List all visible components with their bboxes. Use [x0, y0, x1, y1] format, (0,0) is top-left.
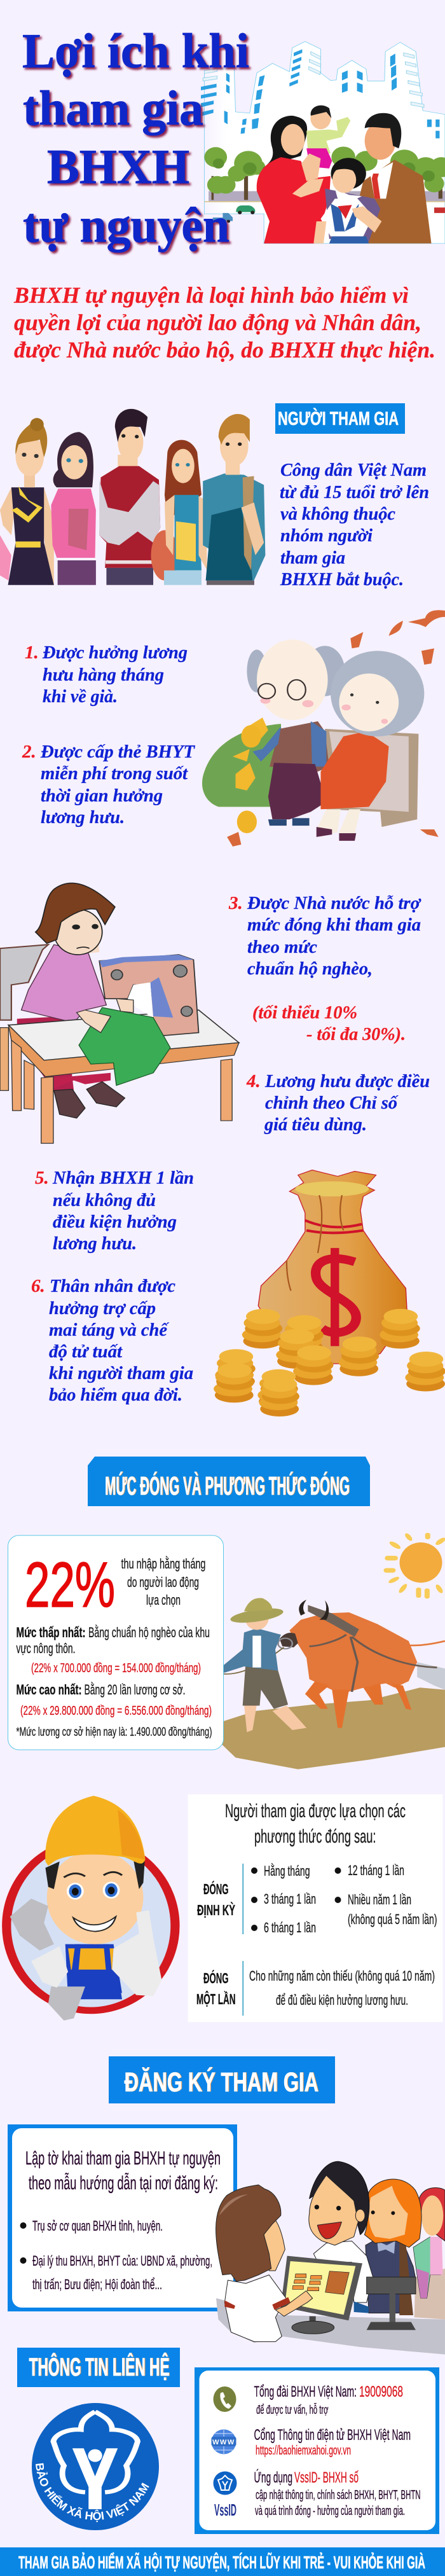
benefit 5: điều kiện hưởng [53, 1212, 177, 1232]
benefit 5: nếu không đủ [53, 1190, 156, 1210]
text: eligible participants [280, 460, 429, 590]
contact: app: VssID- BHXH số [294, 2469, 359, 2486]
section: periodic payment [197, 1862, 437, 1935]
text: minimum rate [17, 1624, 210, 1675]
contact: hotline [254, 2383, 403, 2417]
intro text: quyền lợi của người lao động và Nhân dân, [14, 310, 421, 335]
benefit 1: khi về già. [43, 686, 118, 707]
benefit 4 [246, 1071, 430, 1135]
benefit 2: lương hưu. [41, 807, 125, 828]
benefit 3: mức đóng khi tham gia [247, 915, 421, 935]
benefit 4: 4. [246, 1071, 261, 1091]
label: thông tin liên hệ: THÔNG TIN LIÊN HỆ [29, 2352, 169, 2381]
text: maximum rate: Bằng 20 lần lương cơ sở. [84, 1682, 186, 1698]
benefit 2: 2. [22, 742, 36, 762]
illustration: money bag and coins [214, 1170, 445, 1416]
banner: mức đóng và phương thức đóng [88, 1457, 370, 1506]
list: registration places: Trụ sở cơ quan BHXH tỉnh, huyện. [32, 2218, 163, 2234]
illustration: family in front of city [201, 41, 445, 244]
text: rate description: lựa chọn [146, 1592, 181, 1608]
benefit 6: Thân nhân được [50, 1276, 175, 1296]
icon: sun [384, 1532, 445, 1598]
text: base salary note: *Mức lương cơ sở hiện nay là: 1.490.000 đồng/tháng) [17, 1726, 212, 1739]
title: tham gia [23, 81, 203, 135]
intro text: BHXH tự nguyện là loại hình bảo hiểm vì [13, 282, 409, 308]
benefit 6: hưởng trợ cấp [49, 1298, 156, 1319]
benefit 3: chuẩn hộ nghèo, [247, 959, 373, 979]
intro text: được Nhà nước bảo hộ, do BHXH thực hiện. [14, 337, 435, 363]
text: maximum rate: (22% x 29.800.000 đồng = 6.556.000 đồng/tháng) [20, 1704, 212, 1718]
label: người tham gia [275, 403, 405, 434]
text: rate description [121, 1556, 206, 1608]
section: lump-sum payment: MỘT LẦN [196, 1990, 235, 2007]
icon: phone [214, 2386, 236, 2412]
benefit 1 [25, 642, 188, 707]
heading: payment methods [225, 1801, 406, 1847]
illustration: woman at sewing machine [0, 883, 239, 1144]
contact: hotline: Tổng đài BHXH Việt Nam: [254, 2383, 357, 2400]
stat: 22%: 22% [25, 1549, 115, 1621]
benefit 1: hưu hàng tháng [43, 665, 164, 685]
footer banner [0, 2547, 445, 2576]
section: periodic payment: 6 tháng 1 lần [264, 1920, 316, 1935]
list: registration places: thị trấn; Bưu điện; Hội đoàn thể... [32, 2276, 162, 2292]
text: eligible participants: BHXH bắt buộc. [280, 569, 404, 590]
benefit 3: - tối đa 30%). [306, 1024, 406, 1044]
text: eligible participants: nhóm người [280, 525, 373, 546]
benefit 6: mai táng và chế [49, 1320, 169, 1340]
list: registration places [20, 2218, 212, 2292]
benefit 5: 5. [35, 1168, 49, 1188]
title [22, 24, 249, 253]
benefit 6: khi người tham gia [49, 1363, 193, 1383]
benefit 2: thời gian hưởng [41, 786, 163, 806]
benefit 3 [228, 893, 421, 1044]
logo: Bảo hiểm xã hội Việt Nam [32, 2403, 159, 2530]
illustration: group of young people [0, 409, 265, 585]
text: eligible participants: từ đủ 15 tuổi trở lên [280, 482, 429, 502]
benefit 5 [35, 1168, 194, 1254]
benefit 6: 6. [31, 1276, 45, 1296]
benefit 4: giá tiêu dùng. [264, 1114, 367, 1135]
section: periodic payment: ĐỊNH KỲ [197, 1901, 235, 1918]
text: maximum rate: Mức cao nhất: [17, 1682, 81, 1698]
benefit 6: độ tử tuất [49, 1341, 123, 1362]
text: eligible participants: tham gia [280, 548, 345, 568]
benefit 4: Lương hưu được điều [264, 1071, 430, 1091]
text: eligible participants: và không thuộc [280, 504, 395, 524]
section: periodic payment: 3 tháng 1 lần [264, 1891, 316, 1907]
section: periodic payment: 12 tháng 1 lần [348, 1862, 404, 1878]
text: maximum rate [17, 1682, 212, 1718]
banner: đăng ký tham gia [109, 2056, 335, 2103]
panel: contribution rate [8, 1535, 224, 1750]
heading: registration form: Lập tờ khai tham gia BHXH tự nguyện [25, 2148, 221, 2169]
list: registration places: Đại lý thu BHXH, BHYT của: UBND xã, phường, [32, 2253, 212, 2269]
heading: registration form: theo mẫu hướng dẫn tại nơi đăng ký: [29, 2173, 218, 2194]
illustration: elderly couple on bench [202, 610, 445, 847]
section: lump-sum payment [196, 1961, 435, 2016]
text: minimum rate: Mức thấp nhất: [17, 1624, 85, 1640]
icon: www globe: WWW [212, 2439, 235, 2446]
illustration: people registering at a computer [216, 2161, 445, 2355]
text: minimum rate: Bằng chuẩn hộ nghèo của khu [88, 1624, 210, 1640]
benefit 1: 1. [25, 642, 39, 663]
benefit 3: Được Nhà nước hỗ trợ [247, 893, 421, 913]
logo: Bảo hiểm xã hội Việt Nam: BẢO HIỂM XÃ HỘI VIỆT NAM [36, 2463, 149, 2523]
benefit 1: Được hưởng lương [42, 642, 188, 663]
illustration: worker with wrench [6, 1796, 175, 2021]
contact: website: https://baohiemxahoi.gov.vn [256, 2444, 351, 2458]
benefit 2 [22, 742, 195, 828]
title: tự nguyện [23, 198, 229, 253]
section: periodic payment: Hằng tháng [264, 1863, 310, 1879]
contact: hotline: 19009068 [359, 2383, 403, 2400]
icon: VssID app [214, 2472, 236, 2519]
benefit 2: Được cấp thẻ BHYT [40, 742, 195, 762]
panel: registration [8, 2124, 237, 2311]
title: BHXH [47, 139, 189, 194]
benefit 4: chỉnh theo Chỉ số [265, 1093, 399, 1113]
benefit 3: 3. [228, 893, 243, 913]
text: eligible participants: Công dân Việt Nam [280, 460, 427, 480]
benefit 6: bảo hiểm qua đời. [49, 1385, 182, 1405]
title: Lợi ích khi [22, 24, 249, 78]
benefit 3: (tối thiểu 10% [252, 1002, 357, 1023]
contact: app: Ứng dụng [254, 2469, 292, 2486]
icon: www globe [211, 2430, 236, 2454]
text: minimum rate: vực nông thôn. [17, 1640, 75, 1656]
benefit 5: lương hưu. [53, 1233, 137, 1254]
banner: đăng ký tham gia: ĐĂNG KÝ THAM GIA [125, 2067, 318, 2098]
contact: app [254, 2469, 421, 2518]
section: lump-sum payment: ĐÓNG [203, 1969, 229, 1986]
panel: contact information: VssID [214, 2500, 236, 2519]
benefit 3: theo mức [247, 937, 317, 957]
section: periodic payment: ĐÓNG [203, 1880, 229, 1897]
contact: website [254, 2427, 411, 2458]
panel: payment methods [188, 1794, 442, 2022]
text: rate description: do người lao động [127, 1574, 199, 1590]
panel: contact information [195, 2367, 439, 2534]
illustration: farmer leading ox [210, 1532, 445, 1769]
heading: registration form [25, 2148, 221, 2194]
text: minimum rate: (22% x 700.000 đồng = 154.000 đồng/tháng) [31, 1661, 201, 1675]
text: rate description: thu nhập hằng tháng [121, 1556, 206, 1572]
intro text [13, 282, 435, 363]
contact: hotline: để được tư vấn, hỗ trợ [256, 2403, 328, 2417]
benefit 5: Nhận BHXH 1 lần [52, 1168, 194, 1188]
benefit 6 [31, 1276, 193, 1405]
label: thông tin liên hệ [17, 2348, 180, 2387]
benefit 2: miễn phí trong suốt [41, 763, 188, 784]
label: người tham gia: NGƯỜI THAM GIA [278, 408, 399, 429]
